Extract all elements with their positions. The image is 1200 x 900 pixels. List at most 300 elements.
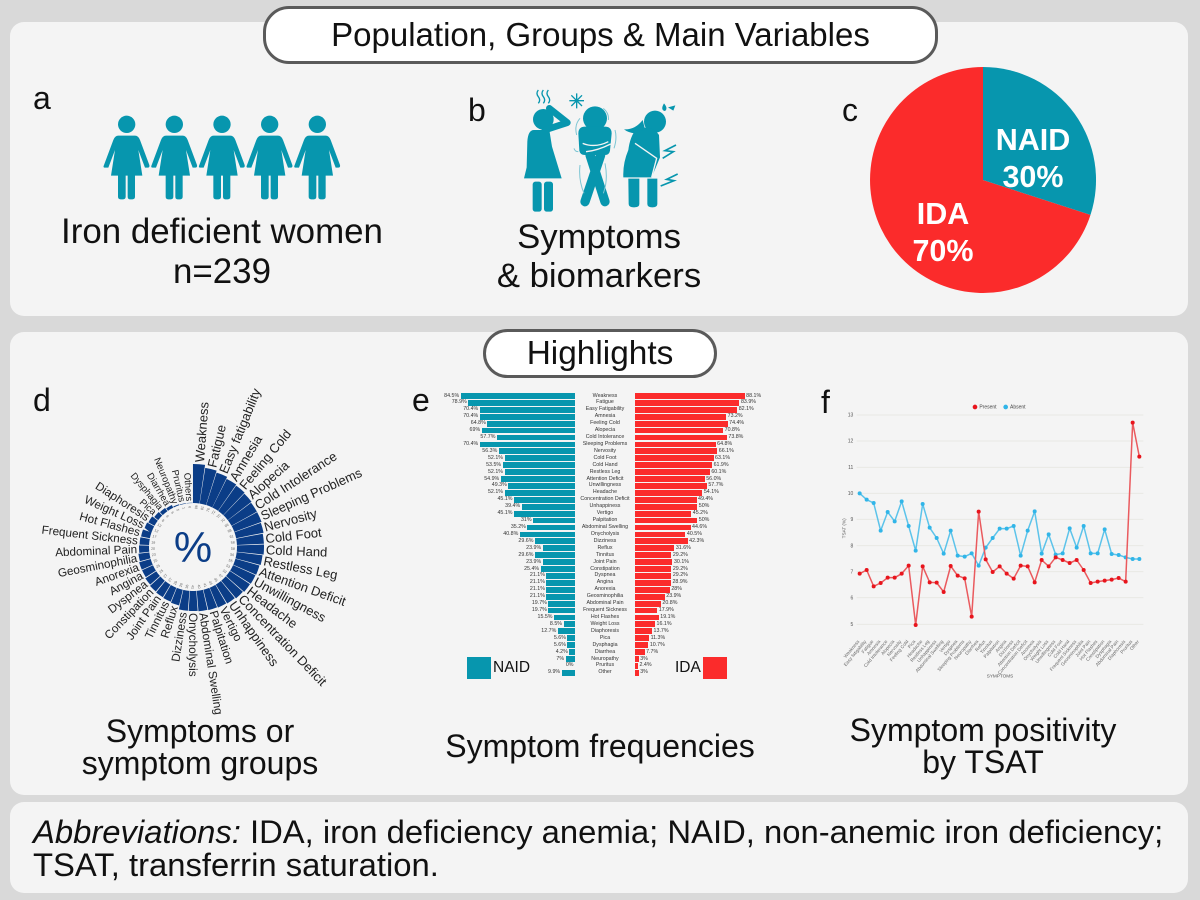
radial labels: Frequent Sickness — [41, 524, 139, 548]
radial labels: Abdominal Pain — [55, 543, 137, 559]
radial value ring — [151, 505, 235, 589]
radial value ring: 45 — [208, 580, 213, 586]
abbreviations text: Abbreviations: IDA, iron deficiency anemia; NAID, non-anemic iron deficiency; — [33, 813, 1163, 850]
x axis symptom labels: Feeling Cold — [889, 639, 910, 662]
panel: abbreviations — [10, 802, 1188, 893]
diverging bar chart: symptom frequencies: Dysphagia — [592, 642, 618, 648]
diverging bar chart: symptom frequencies: Palpitation — [593, 517, 617, 523]
x axis symptom labels: Cold Intolerance — [863, 639, 889, 668]
x axis symptom labels: Abdominal Swelling — [914, 639, 945, 673]
diverging bar chart: symptom frequencies: Easy Fatigability — [586, 406, 624, 412]
diverging bar chart: symptom frequencies: Concentration Deficit — [580, 496, 630, 502]
radial value ring: 6 — [170, 511, 175, 515]
y axis ticks: 13 — [848, 413, 854, 419]
y axis ticks: 11 — [848, 465, 854, 471]
radial value ring: 58 — [231, 540, 235, 545]
y axis title: TSAT (%) — [841, 518, 846, 538]
x axis symptom labels: Constipation — [1085, 639, 1106, 662]
diverging bar chart: symptom frequencies: 29.6% — [518, 552, 533, 558]
radial value ring: 40 — [197, 584, 201, 589]
radial labels: Vertigo — [217, 604, 246, 644]
radial labels: Reflux — [159, 604, 181, 640]
x axis symptom labels: Tinnitus — [979, 639, 994, 655]
caption: symptoms and biomarkers — [497, 218, 701, 295]
pie label: NAID: NAID — [996, 123, 1070, 157]
x axis symptom labels: Vertigo — [938, 639, 952, 653]
diverging bar chart: symptom frequencies: 4.2% — [556, 649, 568, 655]
diverging bar chart: symptom frequencies: 17.9% — [659, 607, 674, 613]
x axis symptom labels: Diaphoresis — [1107, 639, 1127, 661]
x axis title: SYMPTOMS — [987, 674, 1013, 679]
diverging bar chart: symptom frequencies: Alopecia — [595, 427, 615, 433]
diverging bar chart: symptom frequencies: 64.8% — [471, 420, 486, 426]
x axis symptom labels: Unhappiness — [916, 639, 938, 663]
radial labels: Onycholysis — [186, 613, 200, 677]
diverging bar chart: symptom frequencies: 19.1% — [660, 614, 675, 620]
diverging bar chart: symptom frequencies: Pruritus — [596, 662, 614, 668]
x axis symptom labels: Anorexia — [1020, 639, 1036, 656]
radial labels: Angina — [107, 569, 146, 598]
diverging bar chart: symptom frequencies: 5.6% — [554, 642, 566, 648]
legend: IDA: IDA — [675, 659, 701, 676]
caption: symptoms and biomarkers: Symptoms — [517, 218, 681, 256]
y axis ticks: 7 — [851, 569, 854, 575]
diverging bar chart: symptom frequencies: 23.9% — [526, 545, 541, 551]
radial value ring: 13 — [156, 523, 162, 528]
x axis symptom labels: Weakness — [843, 639, 861, 659]
radial value ring: 66 — [224, 523, 230, 528]
diverging bar chart: symptom frequencies: 56.0% — [706, 476, 721, 482]
diverging bar chart: symptom frequencies: 3% — [640, 656, 648, 662]
diverging bar chart: symptom frequencies: Hot Flashes — [591, 614, 619, 620]
radial value ring: 29 — [173, 580, 178, 586]
x axis symptom labels: Concentration Deficit — [997, 639, 1029, 675]
title — [263, 6, 938, 64]
radial labels: Geosminophilia — [57, 552, 139, 580]
radial labels: Restless Leg — [262, 553, 339, 582]
radial value ring: 20 — [151, 547, 155, 551]
diverging bar chart: symptom frequencies: 39.4% — [505, 503, 520, 509]
diverging bar chart: symptom frequencies: 57.7% — [480, 434, 495, 440]
diverging bar chart: symptom frequencies: 23.9% — [526, 559, 541, 565]
diverging bar chart: symptom frequencies: 60.1% — [711, 469, 726, 475]
radial labels: Palpitation — [207, 609, 237, 665]
x axis symptom labels: Pica — [907, 639, 917, 649]
diverging bar chart: symptom frequencies: 69% — [470, 427, 480, 433]
radial labels: Hot Flashes — [78, 510, 142, 539]
diverging bar chart: symptom frequencies: Frequent Sickness — [583, 607, 627, 613]
radial value ring: 23 — [151, 553, 156, 557]
radial labels: Pruritus — [169, 469, 187, 503]
diverging bar chart: symptom frequencies: Tinnitus — [596, 552, 614, 558]
diverging bar chart: symptom frequencies: Restless Leg — [590, 469, 620, 475]
diverging bar chart: symptom frequencies: 54.1% — [704, 489, 719, 495]
diverging bar chart: symptom frequencies: Cold Intolerance — [586, 434, 624, 440]
radial labels: Anorexia — [93, 561, 141, 589]
diverging bar chart: symptom frequencies: 40.8% — [503, 531, 518, 537]
abbreviations text — [31, 813, 1163, 883]
x axis symptom labels: Sleeping Problems — [936, 639, 966, 672]
diverging bar chart: symptom frequencies: Angina — [597, 579, 613, 585]
radial value ring: 6 — [188, 506, 192, 508]
radial labels: Amnesia — [226, 432, 265, 484]
radial labels: Cold Intolerance — [252, 449, 340, 513]
diverging bar chart: symptom frequencies: Anorexia — [595, 586, 615, 592]
diverging bar chart: symptom frequencies: 74.4% — [729, 420, 744, 426]
diverging bar chart: symptom frequencies: 82.1% — [739, 406, 754, 412]
diverging bar chart: symptom frequencies: 23.9% — [666, 593, 681, 599]
x axis symptom labels: Unwillingness — [1034, 639, 1057, 664]
diverging bar chart: symptom frequencies: Dizziness — [594, 538, 616, 544]
radial value ring: 8 — [161, 518, 165, 523]
diverging bar chart: symptom frequencies: 52.1% — [488, 489, 503, 495]
diverging bar chart: symptom frequencies: 61.9% — [714, 462, 729, 468]
title: Population, Groups & Main Variables — [331, 16, 870, 53]
diverging bar chart: symptom frequencies: 21.1% — [530, 593, 545, 599]
radial value ring: 47 — [218, 573, 223, 579]
diverging bar chart: symptom frequencies: 29.6% — [518, 538, 533, 544]
diverging bar chart: symptom frequencies: Unwillingness — [589, 482, 621, 488]
diverging bar chart: symptom frequencies: 50% — [699, 503, 709, 509]
radial value ring: 86 — [194, 505, 199, 509]
radial value ring: 70 — [220, 518, 226, 523]
caption: iron deficient women — [61, 212, 383, 291]
radial value ring: 5 — [176, 508, 180, 512]
y axis ticks: 8 — [851, 543, 854, 549]
caption: iron deficient women: n=239 — [173, 252, 271, 291]
legend: present and absent: Present — [979, 405, 997, 411]
caption: symptoms and biomarkers: & biomarkers — [497, 257, 701, 295]
diverging bar chart: symptom frequencies: 35.2% — [511, 524, 526, 530]
radial labels: Neuropathy — [151, 456, 180, 506]
diverging bar chart: symptom frequencies: 70.4% — [463, 413, 478, 419]
diverging bar chart: symptom frequencies: 45.1% — [497, 496, 512, 502]
radial value ring: 25 — [153, 558, 158, 563]
diverging bar chart: symptom frequencies: Cold Foot — [594, 455, 616, 461]
diverging bar chart: symptom frequencies: 29.2% — [673, 552, 688, 558]
x axis symptom labels: Diarrhea — [964, 639, 980, 656]
radial labels: Constipation — [102, 586, 156, 642]
diverging bar chart: symptom frequencies: 84.5% — [444, 392, 459, 398]
radial value ring: 70 — [216, 514, 221, 519]
radial labels: Nervosity — [262, 506, 319, 535]
diverging bar chart: symptom frequencies: 10.7% — [650, 642, 665, 648]
radial labels: Dyspnea — [106, 578, 151, 616]
diverging bar chart: symptom frequencies: 73.2% — [728, 413, 743, 419]
diverging bar chart: symptom frequencies: Unhappiness — [590, 503, 620, 509]
diverging bar chart: symptom frequencies: Nervosity — [594, 448, 616, 454]
heading: highlights — [483, 329, 717, 378]
diverging bar chart: symptom frequencies: 28% — [671, 586, 682, 592]
legend: present and absent: Absent — [1010, 405, 1026, 411]
radial value ring: 53 — [225, 564, 231, 569]
panel letter e: e — [412, 382, 430, 418]
x axis symptom labels: Headache — [906, 639, 924, 659]
x axis symptom labels: Dyspnea — [943, 639, 959, 656]
diverging bar chart: symptom frequencies: 29.2% — [673, 566, 688, 572]
x axis symptom labels: Neuropathy — [953, 639, 973, 661]
diverging bar chart: symptom frequencies: Pica — [600, 635, 610, 641]
radial value ring: 58 — [231, 547, 235, 551]
diverging bar chart: symptom frequencies: Sleeping Problems — [583, 441, 627, 447]
radial labels: Dysphagia — [128, 471, 165, 513]
radial labels: Pica — [137, 497, 159, 518]
radial labels: Weight Loss — [82, 493, 146, 531]
pie chart: IDA and NAID — [870, 67, 1096, 293]
radial value ring: 36 — [185, 584, 189, 589]
legend: NAID: NAID — [493, 659, 530, 676]
x axis symptom labels: Weight Loss — [1029, 639, 1050, 662]
radial value ring: 55 — [228, 558, 233, 563]
diverging bar chart: symptom frequencies: 66.1% — [719, 448, 734, 454]
diverging bar chart: symptom frequencies: 88.1% — [746, 392, 761, 398]
y axis ticks: 6 — [851, 595, 854, 601]
x axis symptom labels: Attention Deficit — [997, 639, 1022, 667]
diverging bar chart: symptom frequencies: Diaphoresis — [591, 628, 619, 634]
x axis symptom labels: Geosminophilia — [1060, 639, 1085, 667]
icon: three women with symptoms — [524, 90, 678, 212]
y axis ticks: 5 — [851, 622, 854, 628]
radial labels: Others — [181, 472, 194, 502]
diverging bar chart: symptom frequencies: 49.3% — [492, 482, 507, 488]
diverging bar chart: symptom frequencies: 42.3% — [689, 538, 704, 544]
pie slice: IDA 70% — [870, 67, 1090, 293]
percent sign: % — [174, 524, 212, 572]
radial value ring: 28 — [179, 583, 184, 588]
diverging bar chart: symptom frequencies: Feeling Cold — [590, 420, 620, 426]
radial labels: Tinnitus — [143, 599, 172, 641]
radial value ring: 68 — [227, 528, 232, 534]
x axis symptom labels: Hot Flashes — [1079, 639, 1099, 661]
x axis symptom labels: Reflux — [974, 639, 987, 652]
radial labels — [41, 386, 365, 716]
radial value ring: 41 — [202, 583, 207, 588]
diverging bar chart: symptom frequencies: 54.9% — [484, 476, 499, 482]
diverging bar chart: symptom frequencies: Other — [598, 669, 612, 675]
radial labels: Cold Foot — [265, 525, 323, 546]
radial labels: Headache — [244, 583, 300, 631]
x axis symptom labels: Cold Foot — [1047, 639, 1064, 658]
radial value ring: 27 — [167, 577, 173, 583]
caption: symptoms or symptom groups — [82, 713, 318, 781]
radial labels: Diarrhea — [144, 471, 172, 509]
diverging bar chart: symptom frequencies: 15.5% — [538, 614, 553, 620]
diverging bar chart: symptom frequencies: 63.1% — [715, 455, 730, 461]
diverging bar chart: symptom frequencies: 52.1% — [488, 469, 503, 475]
radial labels: Dizziness — [169, 611, 190, 663]
diverging bar chart: symptom frequencies: Neuropathy — [591, 656, 619, 662]
diverging bar chart: symptom frequencies: 40.5% — [687, 531, 702, 537]
diverging bar chart: symptom frequencies: Geosminophilia — [587, 593, 623, 599]
panel letter b: b — [468, 92, 486, 128]
diverging bar chart: symptom frequencies: 30.1% — [674, 559, 689, 565]
radial value ring: 27 — [163, 573, 168, 579]
panel letter c: c — [842, 92, 858, 128]
diverging bar chart: symptom frequencies: 11.3% — [651, 635, 665, 641]
radial value ring: 53 — [222, 569, 227, 574]
panel letter d: d — [33, 382, 51, 418]
radial value ring: 61 — [229, 534, 234, 539]
x axis symptom labels: Restless Leg — [909, 639, 931, 663]
diverging bar chart: symptom frequencies: 64.8% — [717, 441, 732, 447]
x axis symptom labels: Angina — [994, 639, 1008, 653]
diverging bar chart: symptom frequencies: 3% — [640, 669, 648, 675]
radial value ring: 72 — [211, 510, 216, 515]
x axis symptom labels: Frequent Sickness — [1049, 639, 1078, 672]
diverging bar chart: symptom frequencies: 56.3% — [482, 448, 497, 454]
x axis symptom labels: Palpitation — [983, 639, 1001, 659]
x axis symptom labels: Fatigue — [861, 639, 875, 654]
diverging bar chart: symptom frequencies: Amnesia — [595, 413, 615, 419]
diverging bar chart: symptom frequencies: Fatigue — [596, 399, 614, 405]
diverging bar chart: symptom frequencies — [444, 392, 761, 676]
x axis symptom labels: Dizziness — [998, 639, 1015, 658]
diverging bar chart: symptom frequencies: 7.7% — [646, 649, 658, 655]
radial value ring: 1 — [181, 507, 186, 510]
diverging bar chart: symptom frequencies: Dyspnea — [595, 572, 615, 578]
radial bars — [110, 464, 276, 630]
radial value ring: 41 — [191, 585, 195, 589]
diverging bar chart: symptom frequencies: 13.7% — [654, 628, 669, 634]
pie label: NAID value: 30% — [1002, 160, 1064, 194]
diverging bar chart: symptom frequencies: Vertigo — [597, 510, 613, 516]
heading: highlights: Highlights — [527, 335, 673, 372]
x axis symptom labels: Other — [1129, 639, 1140, 651]
x axis symptom labels: Joint Pain — [1074, 639, 1092, 658]
radial labels: Diaphoresis — [93, 480, 152, 524]
legend: IDA — [675, 657, 727, 679]
legend: NAID — [467, 657, 530, 679]
radial value ring: 12 — [154, 528, 159, 534]
panel letter a: a — [33, 80, 51, 116]
x axis symptom labels: Alopecia — [880, 639, 896, 656]
diverging bar chart: symptom frequencies: Weight Loss — [590, 621, 620, 627]
diverging bar chart: symptom frequencies: Abdominal Swelling — [582, 524, 628, 530]
pie label: IDA value: 70% — [912, 234, 974, 268]
diverging bar chart: symptom frequencies: 25.4% — [524, 566, 539, 572]
diverging bar chart: symptom frequencies: Reflux — [597, 545, 612, 551]
line: present — [858, 421, 1141, 627]
radial value ring: 81 — [200, 506, 205, 511]
diverging bar chart: symptom frequencies: 83.9% — [741, 399, 756, 405]
diverging bar chart: symptom frequencies: 70.4% — [463, 406, 478, 412]
diverging bar chart: symptom frequencies: Cold Hand — [592, 462, 618, 468]
x axis symptom labels — [843, 639, 1140, 675]
y axis ticks — [848, 413, 854, 628]
radial labels: Sleeping Problems — [258, 465, 365, 523]
diverging bar chart: symptom frequencies: 12.7% — [541, 628, 556, 634]
diverging bar chart: symptom frequencies: 45.1% — [497, 510, 512, 516]
diverging bar chart: symptom frequencies: 7% — [556, 656, 564, 662]
diverging bar chart: symptom frequencies: 19.7% — [532, 607, 547, 613]
diverging bar chart: symptom frequencies: 50% — [699, 517, 709, 523]
diverging bar chart: symptom frequencies: 0% — [566, 662, 574, 668]
radial labels: Cold Hand — [266, 542, 328, 560]
x axis symptom labels: Easy fatigability — [843, 639, 868, 667]
abbreviations text: TSAT, transferrin saturation. — [33, 846, 439, 883]
radial labels: Unhappiness — [226, 598, 282, 669]
panel: population, groups and main variables — [10, 22, 1188, 316]
radial value ring: 17 — [152, 534, 157, 539]
radial labels: Joint Pain — [124, 593, 164, 643]
caption: symptom positivity by TSAT — [850, 712, 1116, 780]
diverging bar chart: symptom frequencies: 53.5% — [486, 462, 501, 468]
diverging bar chart: symptom frequencies: 2.4% — [639, 662, 652, 668]
y axis ticks: 12 — [848, 439, 854, 445]
x axis symptom labels: Amnesia — [866, 639, 882, 656]
diverging bar chart: symptom frequencies: Weakness — [593, 392, 617, 398]
radial value ring: 19 — [151, 540, 155, 545]
diverging bar chart: symptom frequencies: Attention Deficit — [586, 476, 624, 482]
legend: present and absent — [973, 405, 1026, 411]
radial labels: Fatigue — [204, 423, 229, 469]
caption: symptoms or symptom groups: Symptoms or — [106, 713, 294, 749]
diverging bar chart: symptom frequencies: Abdominal Pain — [586, 600, 624, 606]
diverging bar chart: symptom frequencies: 8.5% — [550, 621, 562, 627]
diverging bar chart: symptom frequencies: 31.6% — [676, 545, 691, 551]
x axis symptom labels: Pruritus — [1119, 639, 1134, 655]
radial labels: Weakness — [192, 401, 212, 463]
icon: five women — [104, 116, 340, 200]
diverging bar chart: symptom frequencies: 21.1% — [530, 572, 545, 578]
radial value ring: 76 — [206, 507, 211, 513]
diverging bar chart: symptom frequencies: 21.1% — [530, 579, 545, 585]
caption: symptom frequencies: Symptom frequencies — [445, 728, 755, 764]
diverging bar chart: symptom frequencies: 16.1% — [657, 621, 672, 627]
x axis symptom labels: Abdominal Pain — [1095, 639, 1120, 667]
radial labels: Unwillingness — [251, 574, 329, 625]
caption: symptom positivity by TSAT: Symptom positivity — [850, 712, 1116, 748]
diverging bar chart: symptom frequencies: 57.7% — [708, 482, 723, 488]
radial value ring: 45 — [213, 577, 219, 583]
radial labels: Attention Deficit — [257, 564, 348, 609]
caption: symptoms or symptom groups: symptom groups — [82, 745, 318, 781]
pie label: IDA: IDA — [917, 197, 969, 231]
radial labels: Feeling Cold — [236, 426, 294, 492]
diverging bar chart: symptom frequencies: 45.2% — [693, 510, 708, 516]
line: absent — [858, 491, 1141, 568]
line chart: symptom positivity by TSAT — [841, 404, 1144, 679]
x axis symptom labels: Onycholysis — [1022, 639, 1043, 662]
x axis symptom labels: Nervosity — [886, 639, 903, 657]
diverging bar chart: symptom frequencies: 44.6% — [692, 524, 707, 530]
diverging bar chart: symptom frequencies: Headache — [593, 489, 617, 495]
x axis symptom labels: Dysphagia — [1094, 639, 1113, 659]
diverging bar chart: symptom frequencies: 21.1% — [530, 586, 545, 592]
diverging bar chart: symptom frequencies: 19.7% — [532, 600, 547, 606]
diverging bar chart: symptom frequencies: 20.8% — [662, 600, 677, 606]
radial value ring: 56 — [230, 553, 235, 557]
radial bar chart: symptoms — [41, 386, 365, 716]
diverging bar chart: symptom frequencies: 52.1% — [488, 455, 503, 461]
diverging bar chart: symptom frequencies: Constipation — [590, 566, 620, 572]
diverging bar chart: symptom frequencies: Diarrhea — [595, 649, 615, 655]
diverging bar chart: symptom frequencies: 70.4% — [463, 441, 478, 447]
diverging bar chart: symptom frequencies: 29.2% — [673, 572, 688, 578]
diverging bar chart: symptom frequencies: 70.8% — [725, 427, 740, 433]
pie slice: NAID 30% — [983, 67, 1096, 215]
y axis ticks: 10 — [848, 491, 854, 497]
panel: highlights — [10, 332, 1188, 795]
radial labels: Alopecia — [245, 457, 293, 502]
diverging bar chart: symptom frequencies: Onycholysis — [591, 531, 619, 537]
diverging bar chart: symptom frequencies: 28.9% — [672, 579, 688, 585]
radial value ring: 25 — [159, 569, 164, 574]
x axis symptom labels: Cold Hand — [1052, 639, 1071, 659]
diverging bar chart: symptom frequencies: 78.9% — [452, 399, 467, 405]
diverging bar chart: symptom frequencies: 5.6% — [554, 635, 566, 641]
radial labels: Easy fatigability — [216, 386, 264, 476]
